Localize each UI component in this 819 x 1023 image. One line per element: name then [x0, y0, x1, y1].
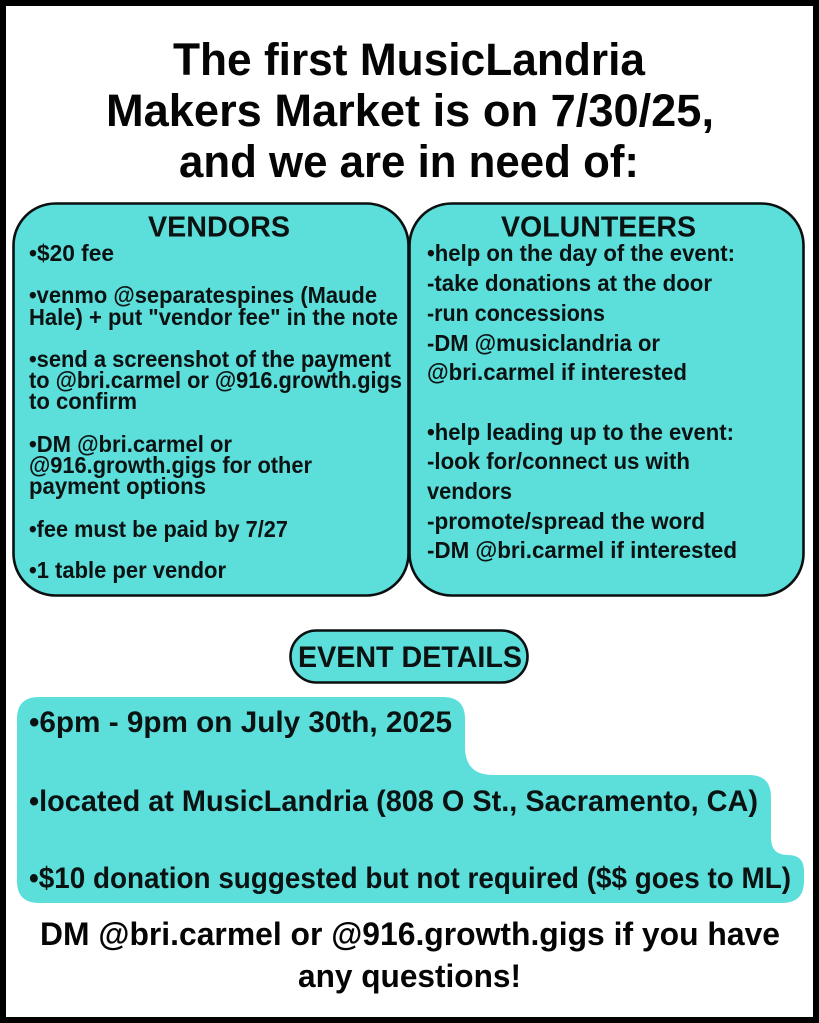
volunteers list: -DM @musiclandria or: [427, 330, 660, 356]
event details list: •6pm - 9pm on July 30th, 2025: [29, 706, 452, 739]
panel: vendors: [14, 204, 408, 596]
vendors panel background: [14, 204, 408, 596]
event details heading pill: [290, 630, 528, 682]
vendors list: •fee must be paid by 7/27: [29, 516, 288, 542]
title: and we are in need of:: [179, 136, 639, 187]
vendors list: to confirm: [29, 388, 137, 414]
title: Makers Market is on 7/30/25,: [106, 85, 714, 136]
event details list: •located at MusicLandria (808 O St., Sacramento, CA): [29, 785, 758, 818]
volunteers list: @bri.carmel if interested: [427, 359, 687, 385]
title: [106, 34, 714, 187]
vendors heading: VENDORS: [148, 212, 290, 244]
volunteers list: -take donations at the door: [427, 270, 712, 296]
closing contact note: DM @bri.carmel or @916.growth.gigs if you have: [40, 916, 780, 952]
volunteers list: -promote/spread the word: [427, 508, 705, 534]
volunteers list: -DM @bri.carmel if interested: [427, 537, 737, 563]
closing contact note: any questions!: [298, 958, 521, 994]
event details heading pill: EVENT DETAILS: [298, 641, 522, 674]
event details stepped background: [17, 697, 804, 903]
vendors list: Hale) + put "vendor fee" in the note: [29, 304, 398, 330]
volunteers list: vendors: [427, 478, 512, 504]
volunteers list: -look for/connect us with: [427, 448, 690, 474]
volunteers list: •help leading up to the event:: [427, 419, 734, 445]
volunteers heading: VOLUNTEERS: [501, 212, 696, 244]
vendors list: •DM @bri.carmel or: [29, 431, 232, 457]
title: The first MusicLandria: [173, 34, 646, 85]
vendors list: payment options: [29, 473, 206, 499]
panel: volunteers: [410, 204, 804, 596]
event details list: [29, 706, 791, 895]
closing contact note: [40, 916, 780, 994]
vendors list: @916.growth.gigs for other: [29, 452, 312, 478]
volunteers panel background: [410, 204, 804, 596]
vendors list: •$20 fee: [29, 240, 114, 266]
volunteers list: -run concessions: [427, 300, 605, 326]
vendors list: •venmo @separatespines (Maude: [29, 282, 377, 308]
volunteers list: [427, 240, 737, 563]
vendors list: to @bri.carmel or @916.growth.gigs: [29, 367, 402, 393]
panel: event details: [17, 697, 804, 903]
vendors list: [29, 240, 402, 583]
volunteers list: •help on the day of the event:: [427, 240, 735, 266]
vendors list: •1 table per vendor: [29, 557, 226, 583]
vendors list: •send a screenshot of the payment: [29, 346, 391, 372]
